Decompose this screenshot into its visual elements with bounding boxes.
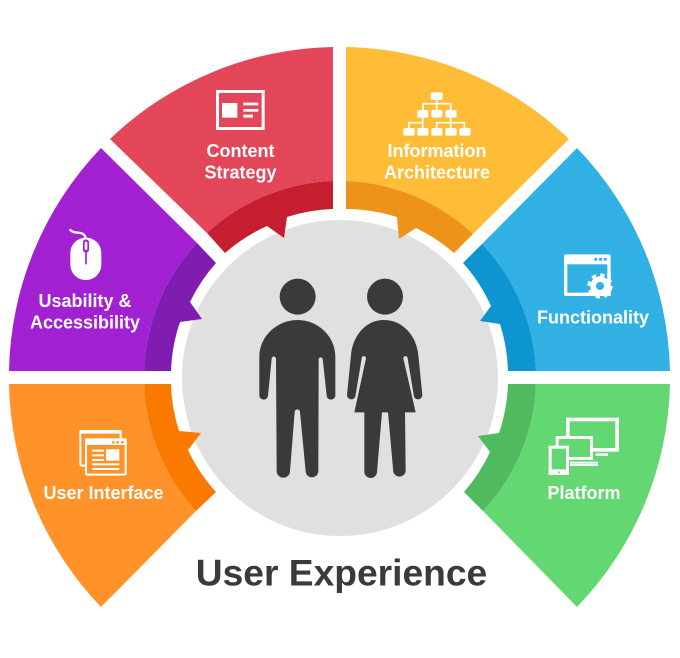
icon: woman figure — [347, 279, 422, 478]
segment: Usability & Accessibility — [9, 148, 216, 371]
icon: devices — [549, 419, 617, 475]
icon: hierarchy — [403, 92, 471, 136]
segment: Content Strategy — [110, 47, 333, 253]
label: Information Architecture: Architecture — [384, 162, 490, 182]
central circle — [182, 220, 498, 536]
icon: mouse — [70, 229, 101, 280]
label: Platform: Platform — [547, 483, 621, 503]
segment: User Interface — [9, 384, 216, 607]
label: Usability & Accessibility: Accessibility — [30, 312, 140, 332]
segment: Functionality — [463, 148, 670, 371]
label: Content Strategy: Strategy — [204, 162, 277, 182]
segment: Platform — [464, 384, 670, 607]
label: Functionality: Functionality — [537, 308, 649, 328]
label: User Interface: User Interface — [43, 483, 164, 503]
label: Usability & Accessibility: Usability & — [38, 291, 132, 311]
label: Content Strategy: Content — [207, 141, 274, 161]
icon: content layout — [217, 91, 263, 128]
segment: Information Architecture — [346, 47, 569, 253]
icon: window with gear — [564, 254, 611, 297]
label: Information Architecture: Information — [388, 141, 486, 161]
icon: browser windows — [79, 430, 127, 475]
title: User Experience — [196, 552, 487, 594]
icon: man figure — [259, 279, 335, 478]
